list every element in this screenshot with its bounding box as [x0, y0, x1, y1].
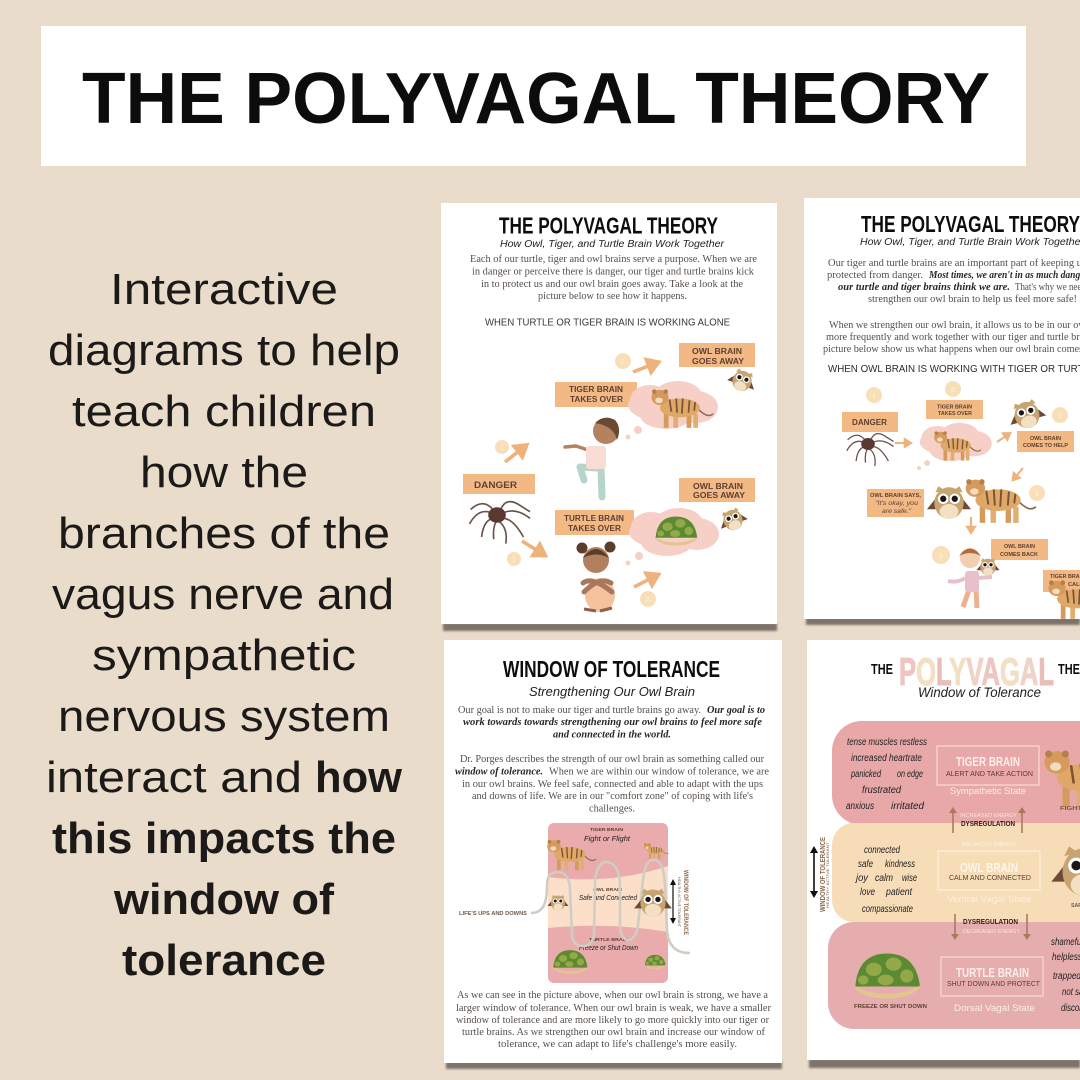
arrow: [996, 432, 1012, 443]
intro text: challenges.: [589, 804, 635, 814]
qualities list: love: [860, 887, 875, 898]
label: owl brain comes back: OWL BRAIN: [1004, 544, 1035, 550]
left description text: [46, 265, 403, 985]
state box: TURTLE BRAIN: [956, 965, 1029, 980]
dysregulation up: DYSREGULATION: [961, 819, 1015, 828]
state name: Ventral Vagal State: [947, 894, 1031, 904]
label: danger: [842, 412, 898, 432]
closing text: larger window of tolerance. When our owl brain is weak, we have a smaller: [456, 1003, 772, 1014]
left description text: this impacts the: [52, 814, 396, 863]
balanced energy: BALANCED ENERGY: [962, 842, 1017, 848]
icon: spider: [470, 502, 530, 544]
illustration: girl: [576, 542, 616, 612]
diagram: window of tolerance: [531, 823, 690, 983]
left description text: vagus nerve and: [52, 570, 394, 619]
band label: tiger brain: [584, 827, 631, 843]
step 2 marker: 2: [951, 387, 955, 394]
subheading: Window of Tolerance: [918, 684, 1041, 700]
icon: turtle: [853, 954, 921, 998]
label: danger: [463, 474, 535, 494]
state name: Sympathetic State: [950, 786, 1026, 796]
intro text: work towards towards strengthening our owl brains to feel more safe: [463, 717, 762, 728]
qualities list: connected: [864, 845, 900, 856]
intro text: in our owl brains. We feel safe, connected and able to adapt with the ups: [462, 779, 763, 790]
icon: owl: [1010, 399, 1046, 428]
heading: THE: [871, 661, 893, 678]
arrow: [499, 435, 536, 470]
step 4 marker: 4: [1035, 491, 1039, 498]
left description text: diagrams to help: [48, 326, 400, 375]
left description text: Interactive: [110, 265, 338, 314]
label: tiger brain takes over: TAKES OVER: [570, 395, 623, 404]
closing text: turtle brains. As we strengthen our owl brain and increase our window of: [462, 1027, 766, 1038]
double arrow: window of tolerance: [810, 846, 818, 898]
icon: owl: [1051, 846, 1080, 896]
icons: tigers: [547, 840, 669, 870]
panel: window of tolerance: [444, 640, 782, 1069]
arrow: [1012, 468, 1024, 482]
icon: tiger: [966, 479, 1036, 523]
step 2 marker: 2: [646, 597, 650, 604]
label: owl brain comes to help: [1017, 431, 1074, 452]
step 3 marker: [1052, 407, 1068, 423]
label: tiger brain takes over: TAKES OVER: [938, 411, 972, 417]
thought bubble: tiger: [626, 381, 718, 440]
qualities list: compassionate: [862, 904, 913, 915]
icon: spider: [847, 434, 894, 466]
left description text: nervous system: [58, 692, 390, 741]
label: tiger brain takes over: TIGER BRAIN: [937, 404, 972, 410]
label: owl brain says: OWL BRAIN SAYS,: [870, 493, 921, 499]
intro text: picture below to see how it happens.: [538, 291, 687, 302]
dysregulation down: DECREASED ENERGY: [963, 929, 1020, 935]
heading: POLYVAGAL: [899, 651, 1054, 694]
label: tiger brain calms: [1043, 570, 1080, 592]
caption: FREEZE OR SHUT DOWN: [854, 1004, 927, 1010]
label: tiger brain takes over: [926, 400, 983, 419]
label: owl brain goes away: GOES AWAY: [693, 491, 746, 500]
band label: owl brain: Safe and Connected: [579, 895, 638, 902]
label: owl brain says: "It's okay, you: [875, 501, 919, 507]
panel: when owl brain works with tiger or turtle: [804, 198, 1080, 625]
vertical label: window of tolerance: [818, 837, 830, 912]
intro text: and downs of life. We are in our "comfort zone" of coping with life's: [472, 791, 753, 802]
arrow: [895, 437, 913, 449]
label: owl brain says: are safe.": [882, 509, 912, 515]
band label: turtle brain: [579, 937, 638, 952]
icons: turtles: [552, 950, 666, 974]
symptoms list: panicked: [850, 769, 881, 780]
dysregulation up: [949, 807, 1026, 833]
label: owl brain goes away: [679, 343, 755, 367]
label: owl brain comes back: COMES BACK: [1000, 552, 1038, 558]
state box: OWL BRAIN: [960, 860, 1018, 875]
intro text: Our goal is to: [707, 705, 765, 716]
line: life's ups and downs: [531, 860, 690, 953]
band label: owl brain: OWL BRAIN: [593, 887, 622, 892]
intro text: protected from danger.: [827, 270, 923, 281]
symptoms list: on edge: [897, 769, 923, 780]
arrow: [629, 352, 666, 381]
closing text: tolerance, we can adapt to life's challenge's more easily.: [498, 1039, 737, 1050]
dysregulation up: INCREASED ENERGY: [960, 813, 1017, 819]
thought bubble: turtle: [626, 508, 719, 566]
heading: [871, 658, 1080, 686]
label: owl brain comes back: [991, 539, 1048, 560]
label: turtle brain takes over: TAKES OVER: [568, 524, 621, 533]
qualities list: calm: [875, 873, 893, 884]
label: owl brain comes to help: OWL BRAIN: [1030, 436, 1061, 442]
symptoms list: increased heartrate: [851, 753, 922, 764]
intro text: in to protect us and our owl brain goes away. Take a look at the: [481, 279, 743, 290]
band: tiger brain: [832, 721, 1080, 825]
intro text: [823, 258, 1080, 355]
symptoms list: frustrated: [862, 785, 901, 796]
label: tiger brain takes over: [555, 382, 637, 407]
vertical label: window of tolerance: [677, 870, 689, 936]
left description text: how: [315, 753, 403, 802]
step 1 marker: [507, 552, 521, 566]
band label: turtle brain: TURTLE BRAIN: [589, 937, 628, 942]
symptoms list: [846, 737, 927, 812]
heading: THE POLYVAGAL THEORY: [499, 212, 718, 238]
step 5 marker: [932, 546, 950, 564]
state box: CALM AND CONNECTED: [949, 875, 1031, 882]
state box: SHUT DOWN AND PROTECT: [947, 981, 1041, 988]
label: owl brain comes to help: COMES TO HELP: [1023, 443, 1068, 449]
step 1 marker: 1: [512, 557, 516, 564]
left description text: how the: [140, 448, 308, 497]
icon: owl: [725, 366, 759, 395]
icon: tiger: [1044, 750, 1080, 807]
subheading: Strengthening Our Owl Brain: [529, 684, 695, 699]
step 2 marker: [615, 353, 631, 369]
left description text: interact and: [46, 753, 302, 802]
label: owl brain goes away: OWL BRAIN: [692, 347, 742, 356]
label: tiger brain takes over: TIGER BRAIN: [569, 385, 623, 394]
symptoms list: tense muscles restless: [847, 737, 927, 748]
label: danger: DANGER: [474, 480, 517, 491]
heading: WINDOW OF TOLERANCE: [503, 656, 720, 682]
intro text: our turtle and tiger brains think we are.: [838, 282, 1010, 293]
qualities list: patient: [885, 887, 913, 898]
intro text: Dr. Porges describes the strength of our owl brain as something called our: [460, 754, 765, 765]
icon: tiger: [1048, 580, 1080, 619]
icon: owl: [716, 505, 750, 534]
arrow: [517, 533, 554, 566]
illustration: boy: [565, 418, 619, 497]
band: turtle brain: [828, 922, 1080, 1029]
left description text: teach children: [72, 387, 376, 436]
band label: tiger brain: Fight or Flight: [584, 836, 631, 843]
label: turtle brain takes over: [555, 510, 634, 535]
label: turtle brain takes over: TURTLE BRAIN: [564, 514, 624, 523]
section heading: WHEN TURTLE OR TIGER BRAIN IS WORKING ALONE: [485, 316, 730, 328]
qualities list: [854, 845, 917, 915]
intro text: Each of our turtle, tiger and owl brains serve a purpose. When we are: [470, 254, 757, 265]
label: owl brain says: [867, 489, 924, 517]
double arrow: [670, 879, 676, 924]
intro text: Our goal is not to make our tiger and turtle brains go away.: [458, 705, 701, 716]
qualities list: safe: [858, 859, 873, 870]
arrow: [629, 564, 666, 596]
qualities list: kindness: [885, 859, 915, 870]
step 2 marker: 2: [620, 359, 624, 366]
step 1 marker: 1: [872, 393, 876, 400]
closing text: window of tolerance and are more likely to go more quickly into our tiger or: [456, 1015, 770, 1026]
left description text: branches of the: [58, 509, 390, 558]
state box: [941, 957, 1043, 996]
intro text: Our tiger and turtle brains are an important part of keeping us: [828, 258, 1080, 269]
label: life's ups and downs: LIFE'S UPS AND DOWNS: [459, 911, 528, 917]
vertical label: window of tolerance: WINDOW OF TOLERANCE: [682, 870, 689, 936]
step 4 marker: [1029, 485, 1045, 501]
icon: owl: [927, 486, 971, 519]
panel: polyvagal window of tolerance chart: [807, 640, 1080, 1068]
step 5 marker: 5: [939, 553, 943, 560]
caption: FIGHT: [1060, 806, 1080, 812]
vertical label: window of tolerance: HEALTHY ACTIVE TOLERANT: [826, 841, 830, 908]
label: owl brain goes away: GOES AWAY: [692, 357, 745, 366]
title banner: [41, 26, 1026, 166]
state box: TIGER BRAIN: [956, 754, 1020, 769]
label: owl brain goes away: [679, 478, 755, 502]
step 2 marker: [640, 591, 656, 607]
subheading: How Owl, Tiger, and Turtle Brain Work Together: [860, 237, 1080, 248]
qualities list: wise: [902, 873, 917, 884]
step 1 marker: 1: [500, 445, 504, 452]
dysregulation down: [951, 914, 1031, 940]
band label: turtle brain: Freeze or Shut Down: [579, 945, 638, 952]
arrow: [965, 517, 977, 535]
intro text: [470, 254, 757, 302]
qualities list: joy: [854, 873, 869, 884]
closing text: As we can see in the picture above, when our owl brain is strong, we have a: [457, 990, 768, 1001]
symptoms list: anxious: [846, 801, 874, 812]
step 2 marker: [945, 381, 961, 397]
vertical label: window of tolerance: HEALTHY ACTIVE TOLERANT: [677, 877, 681, 928]
symptoms list: [1051, 937, 1080, 1014]
panel: how owl, tiger and turtle brain work together: [441, 203, 777, 631]
dysregulation down: DYSREGULATION: [963, 917, 1018, 926]
band label: tiger brain: TIGER BRAIN: [590, 827, 623, 832]
state box: [937, 746, 1039, 785]
label: danger: DANGER: [852, 418, 887, 427]
intro text: [455, 705, 769, 814]
step 1 marker: [495, 440, 509, 454]
band: owl brain: [832, 823, 1080, 922]
closing text: [456, 990, 772, 1050]
intro text: When we are within our window of tolerance, we are: [549, 766, 769, 778]
vertical label: window of tolerance: WINDOW OF TOLERANCE: [818, 837, 827, 912]
thought bubble: tiger: [917, 423, 992, 470]
intro text: in danger or perceive there is danger, our tiger and turtle brains kick: [472, 266, 755, 278]
icons: owls: [548, 889, 672, 916]
state box: [938, 851, 1040, 890]
left description text: sympathetic: [92, 631, 356, 680]
state box: ALERT AND TAKE ACTION: [946, 771, 1033, 778]
intro text: window of tolerance.: [455, 766, 543, 778]
symptoms list: irritated: [891, 801, 924, 812]
band label: owl brain: [579, 887, 638, 902]
left description text: tolerance: [122, 936, 326, 985]
label: owl brain goes away: OWL BRAIN: [693, 482, 743, 491]
step 3 marker: 3: [1058, 413, 1062, 420]
intro text: strengthen our owl brain to help us feel more safe!: [868, 294, 1077, 305]
subheading: How Owl, Tiger, and Turtle Brain Work Together: [500, 239, 725, 250]
illustration: boy with owl: [948, 548, 1000, 608]
title banner: THE POLYVAGAL THEORY: [82, 59, 990, 139]
state name: Dorsal Vagal State: [954, 1003, 1035, 1013]
intro text: and connected in the world.: [553, 730, 671, 740]
step 1 marker: [866, 387, 882, 403]
left description text: window of: [113, 875, 334, 924]
